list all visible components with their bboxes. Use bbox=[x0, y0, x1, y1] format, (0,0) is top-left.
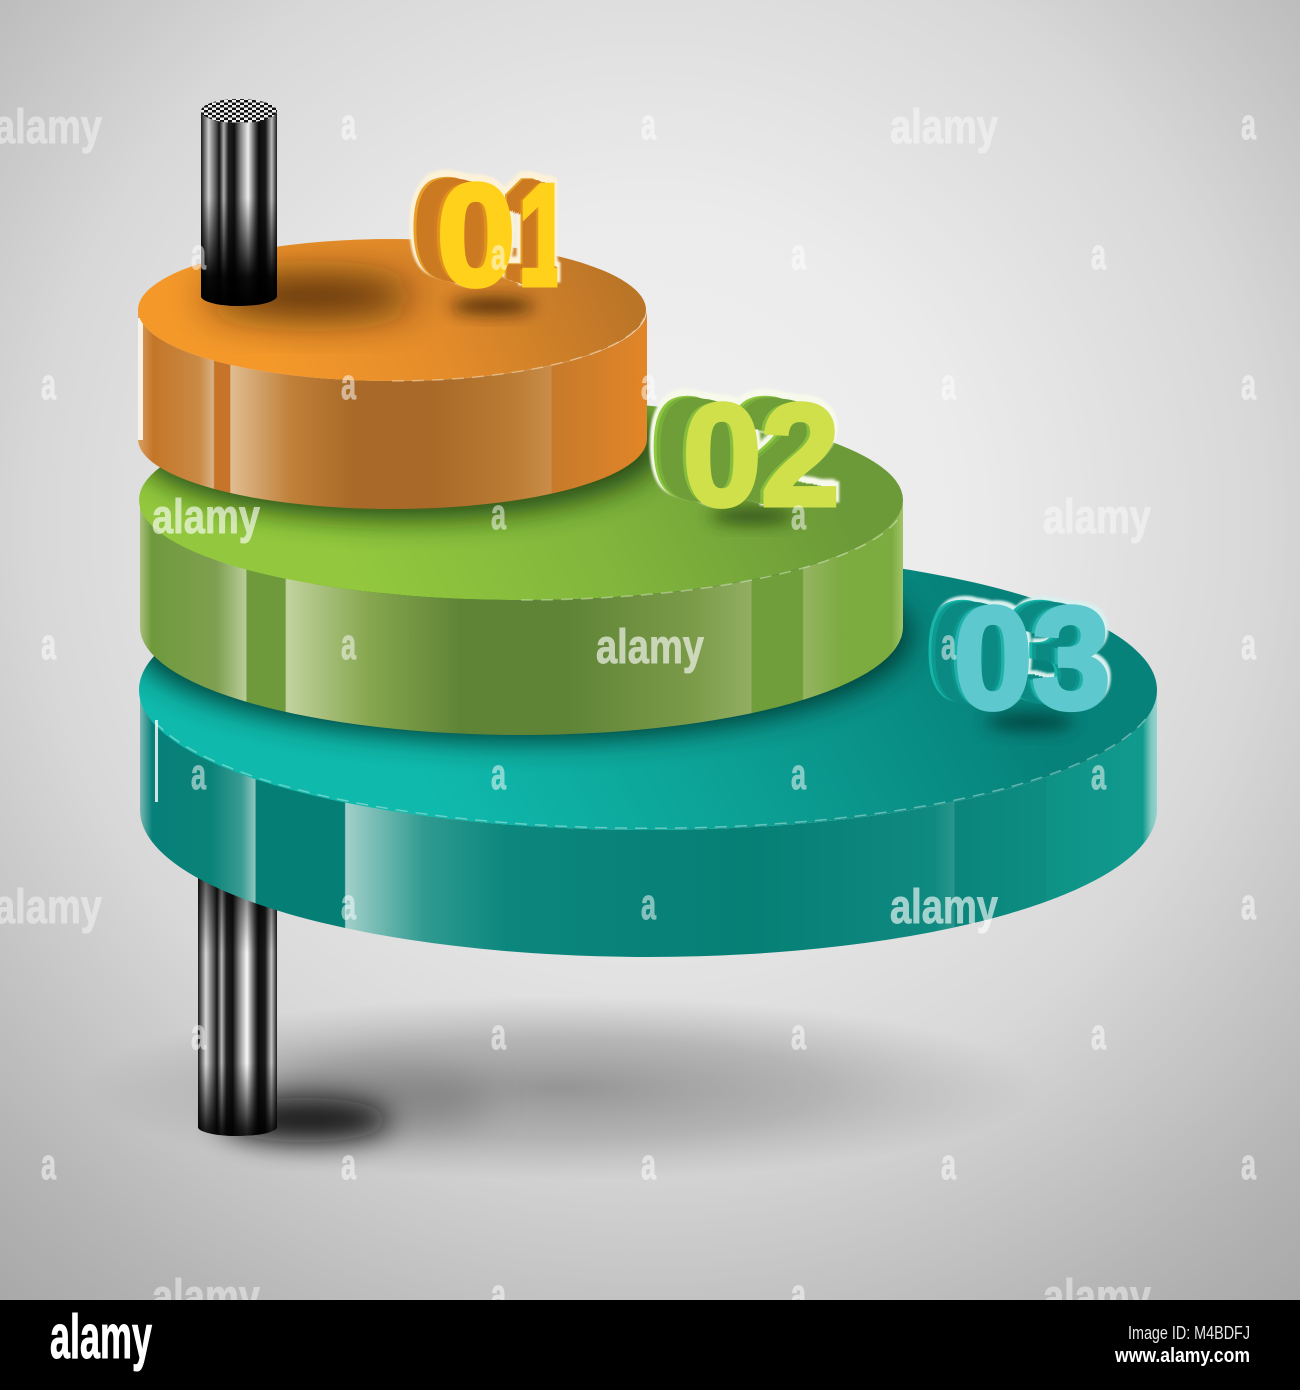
3D disc scene bbox=[138, 99, 1157, 1168]
watermark pattern: a bbox=[191, 750, 206, 799]
teal disc side bbox=[140, 690, 1157, 957]
watermark pattern: a bbox=[341, 100, 356, 149]
green disc top bbox=[139, 400, 903, 600]
panel: teal disc 03 bbox=[131, 529, 1157, 957]
watermark pattern: a bbox=[1241, 360, 1256, 409]
number 01: 1 bbox=[518, 154, 570, 316]
image id: Image ID: M4BDFJ bbox=[1128, 1323, 1250, 1343]
watermark pattern: a bbox=[791, 1270, 806, 1319]
watermark pattern: a bbox=[341, 620, 356, 669]
shadow of green disc on teal top bbox=[131, 529, 911, 741]
watermark pattern: a bbox=[1241, 880, 1256, 929]
green disc side bbox=[140, 500, 903, 735]
watermark pattern: a bbox=[191, 230, 206, 279]
watermark pattern: a bbox=[1241, 1140, 1256, 1189]
watermark pattern: a bbox=[491, 230, 506, 279]
floor shadow bbox=[80, 996, 1040, 1180]
watermark pattern: alamy bbox=[596, 621, 704, 674]
orange disc side bbox=[138, 310, 647, 509]
watermark pattern: alamy bbox=[890, 881, 998, 934]
watermark pattern: a bbox=[341, 360, 356, 409]
watermark pattern: a bbox=[491, 1270, 506, 1319]
watermark pattern: a bbox=[1091, 230, 1106, 279]
panel: green disc 02 bbox=[138, 376, 903, 735]
watermark pattern: a bbox=[641, 1140, 656, 1189]
watermark pattern: a bbox=[791, 750, 806, 799]
watermark pattern: a bbox=[941, 1140, 956, 1189]
number 01: 0 bbox=[437, 154, 515, 316]
shadow under number 01 bbox=[450, 298, 534, 314]
watermark pattern: alamy bbox=[890, 101, 998, 154]
watermark pattern: a bbox=[791, 490, 806, 539]
watermark pattern: a bbox=[1091, 750, 1106, 799]
watermark pattern: a bbox=[941, 620, 956, 669]
watermark pattern: a bbox=[41, 1140, 56, 1189]
number 01 bbox=[408, 154, 562, 316]
number 03: 03 bbox=[954, 577, 1110, 739]
watermark pattern: a bbox=[341, 1140, 356, 1189]
shadow of orange disc on green top bbox=[138, 376, 662, 520]
watermark pattern: a bbox=[791, 1010, 806, 1059]
watermark pattern: a bbox=[641, 360, 656, 409]
watermark pattern: a bbox=[341, 880, 356, 929]
watermark pattern: a bbox=[41, 620, 56, 669]
watermark pattern: a bbox=[491, 1010, 506, 1059]
watermark pattern: alamy bbox=[1043, 1271, 1151, 1324]
watermark pattern: a bbox=[491, 490, 506, 539]
upper pillar bbox=[201, 99, 277, 306]
watermark pattern: a bbox=[491, 750, 506, 799]
teal disc top bbox=[139, 550, 1157, 830]
number 02: 02 bbox=[683, 374, 839, 536]
shadow under number 02 bbox=[710, 508, 794, 524]
shadow under number 03 bbox=[986, 713, 1074, 731]
watermark pattern: a bbox=[641, 880, 656, 929]
watermark pattern: a bbox=[941, 360, 956, 409]
watermark pattern: a bbox=[41, 360, 56, 409]
footer logo: alamy bbox=[50, 1303, 152, 1372]
watermark pattern: a bbox=[1241, 620, 1256, 669]
watermark pattern: alamy bbox=[152, 491, 260, 544]
orange disc top bbox=[138, 239, 646, 381]
footer bar bbox=[0, 1300, 1300, 1390]
panel: orange disc 01 bbox=[138, 239, 647, 509]
watermark pattern: a bbox=[1241, 100, 1256, 149]
watermark pattern: a bbox=[1091, 1010, 1106, 1059]
watermark pattern: a bbox=[641, 100, 656, 149]
watermark pattern: a bbox=[791, 230, 806, 279]
shadow of pillar on orange top bbox=[205, 274, 415, 318]
watermark pattern: alamy bbox=[1043, 491, 1151, 544]
lower pillar bbox=[198, 875, 277, 1136]
watermark pattern: alamy bbox=[152, 1271, 260, 1324]
website: www.alamy.com bbox=[1114, 1345, 1250, 1367]
watermark pattern: a bbox=[191, 1010, 206, 1059]
